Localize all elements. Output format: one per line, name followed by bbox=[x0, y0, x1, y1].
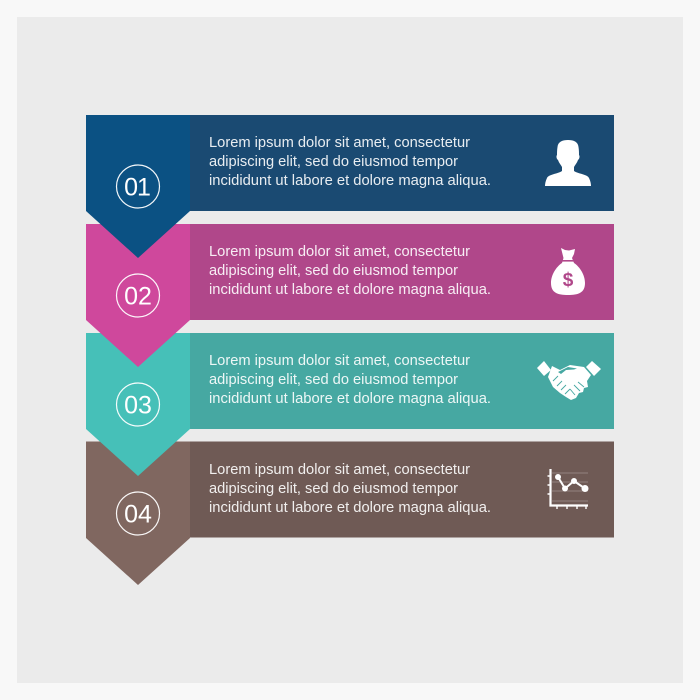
step 03 text: Lorem ipsum dolor sit amet, consectetur bbox=[209, 353, 470, 369]
step 02 text: adipiscing elit, sed do eiusmod tempor bbox=[209, 263, 458, 279]
step 01 panel bbox=[86, 115, 614, 258]
step 02 arrow tab bbox=[86, 224, 190, 367]
icon: line chart bbox=[548, 469, 588, 509]
step 01 text bbox=[209, 135, 491, 189]
step 04 number badge: 04 bbox=[124, 500, 152, 528]
step 03 text bbox=[209, 353, 491, 407]
step 04 arrow tab bbox=[86, 442, 190, 585]
step 04 panel bbox=[86, 442, 614, 585]
icon: money bag bbox=[551, 248, 585, 295]
step 02 panel bbox=[86, 224, 614, 367]
step 04 text bbox=[209, 462, 491, 516]
step 03 text: incididunt ut labore et dolore magna aliqua. bbox=[209, 391, 491, 407]
step 03 panel bbox=[86, 333, 614, 476]
step 02 text bbox=[209, 244, 491, 298]
step 02 text: incididunt ut labore et dolore magna aliqua. bbox=[209, 282, 491, 298]
step 02 number badge bbox=[116, 274, 160, 317]
step 01 text: adipiscing elit, sed do eiusmod tempor bbox=[209, 154, 458, 170]
step 01 text: Lorem ipsum dolor sit amet, consectetur bbox=[209, 135, 470, 151]
step 04 text bar bbox=[190, 442, 614, 538]
step 04 text: Lorem ipsum dolor sit amet, consectetur bbox=[209, 462, 470, 478]
step 03 number badge bbox=[116, 383, 160, 426]
step 01 text bar bbox=[190, 115, 614, 211]
step 01 arrow tab bbox=[86, 115, 190, 258]
icon: user silhouette bbox=[545, 140, 591, 186]
step 02 number badge: 02 bbox=[124, 282, 152, 310]
step 04 number badge bbox=[116, 492, 160, 535]
step 01 text: incididunt ut labore et dolore magna aliqua. bbox=[209, 173, 491, 189]
icon: handshake bbox=[537, 361, 601, 400]
step 03 text: adipiscing elit, sed do eiusmod tempor bbox=[209, 372, 458, 388]
step 04 text: incididunt ut labore et dolore magna aliqua. bbox=[209, 500, 491, 516]
step 01 number badge bbox=[116, 165, 160, 208]
step 04 text: adipiscing elit, sed do eiusmod tempor bbox=[209, 481, 458, 497]
step 03 arrow tab bbox=[86, 333, 190, 476]
step 03 text bar bbox=[190, 333, 614, 429]
icon: money bag: $ bbox=[563, 270, 574, 291]
step 03 number badge: 03 bbox=[124, 392, 152, 420]
step 01 number badge: 01 bbox=[124, 174, 150, 202]
step 02 text: Lorem ipsum dolor sit amet, consectetur bbox=[209, 244, 470, 260]
step 02 text bar bbox=[190, 224, 614, 320]
